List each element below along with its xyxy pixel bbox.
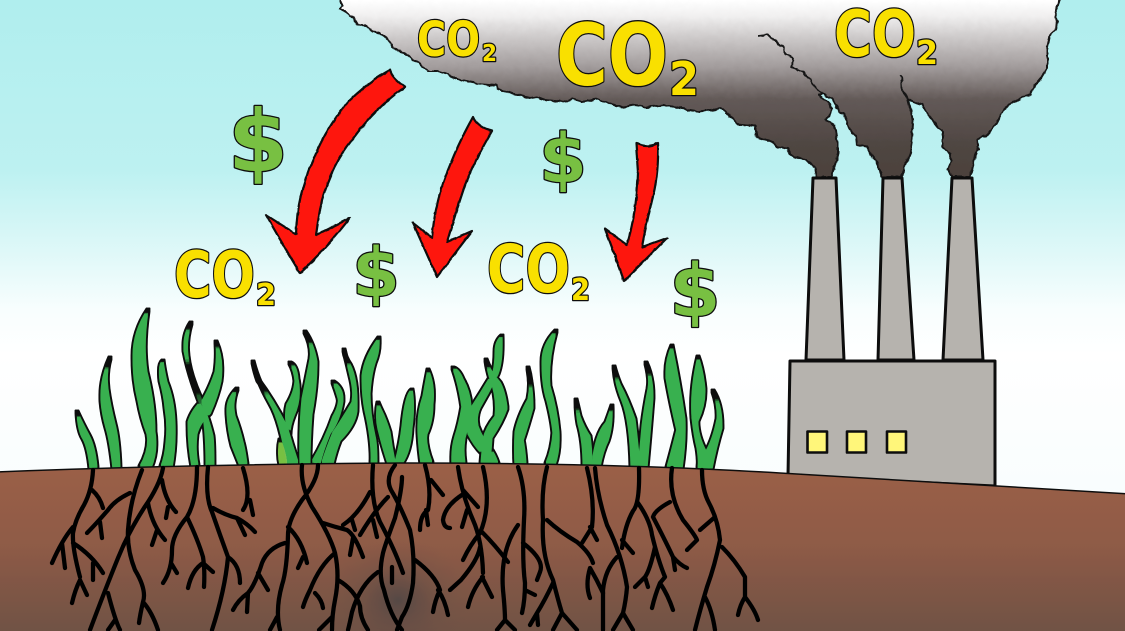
window 3 bbox=[887, 432, 906, 452]
label: CO2 on right plume: 2 bbox=[916, 33, 938, 72]
dollar sign 2: $ bbox=[539, 120, 587, 199]
chimney 1 bbox=[806, 178, 844, 360]
window 1 bbox=[808, 432, 827, 452]
factory bbox=[788, 178, 995, 486]
smoke cloud bbox=[340, 0, 1062, 177]
label: CO2 left above grass: CO bbox=[174, 239, 255, 313]
label: CO2 small on cloud: CO bbox=[417, 12, 480, 68]
grass blades bbox=[77, 310, 722, 468]
dollar sign 1: $ bbox=[228, 92, 288, 192]
label: CO2 large on cloud: CO bbox=[556, 6, 668, 106]
dark soil patch bbox=[326, 538, 470, 631]
label: CO2 middle above grass: 2 bbox=[571, 273, 590, 308]
smoke inner edge lines bbox=[759, 35, 908, 100]
arrow 1 bbox=[266, 70, 405, 273]
label: CO2 middle above grass: CO bbox=[487, 231, 570, 308]
dollar sign 4: $ bbox=[670, 249, 720, 334]
ground soil bbox=[0, 463, 1125, 631]
chimney 3 bbox=[943, 178, 983, 360]
factory building bbox=[788, 361, 995, 486]
window 2 bbox=[847, 432, 866, 452]
arrow 3 bbox=[605, 143, 667, 281]
label: CO2 on right plume: CO bbox=[834, 0, 916, 72]
arrow 2 bbox=[413, 117, 492, 277]
chimney 2 bbox=[878, 178, 914, 360]
dollar sign 3: $ bbox=[352, 234, 400, 313]
label: CO2 left above grass: 2 bbox=[256, 278, 276, 313]
plant roots bbox=[52, 465, 758, 630]
label: CO2 small on cloud: 2 bbox=[482, 41, 497, 67]
label: CO2 large on cloud: 2 bbox=[669, 52, 699, 106]
